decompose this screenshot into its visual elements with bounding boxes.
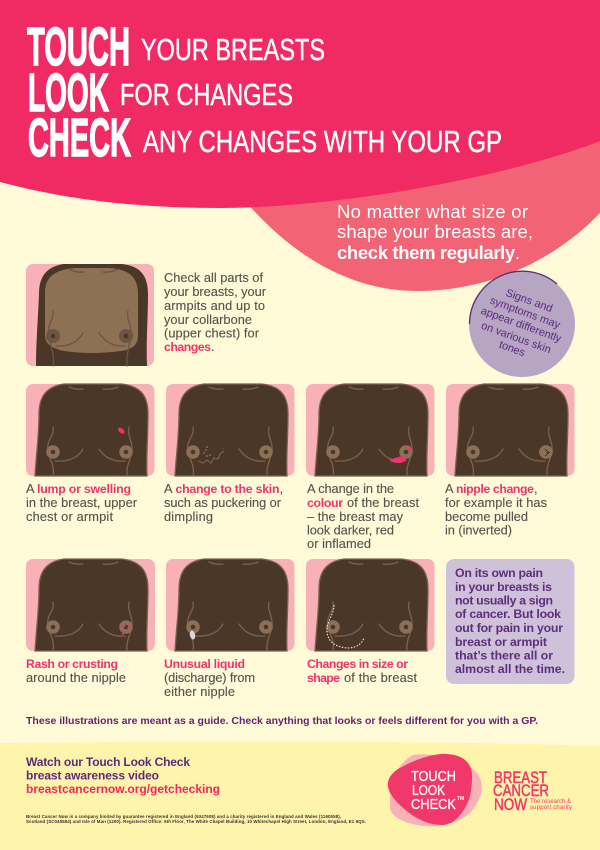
title: CHECK	[28, 108, 131, 168]
callout: skin tones	[469, 271, 575, 377]
video call to action: Watch our Touch Look Check	[26, 755, 190, 769]
text: size	[307, 657, 417, 685]
text: skin: A	[164, 481, 173, 496]
coral intro shape	[236, 120, 600, 291]
panel: pain note: that’s there all or	[455, 648, 553, 662]
text: liquid: (discharge) from	[164, 670, 255, 685]
video call to action: breast awareness video	[26, 768, 159, 782]
text: colour: or inflamed	[307, 536, 371, 551]
panel: pain note: On its own pain	[455, 566, 543, 580]
text: skin	[164, 481, 283, 524]
legal text	[26, 814, 366, 824]
intro text: check them regularly.	[337, 242, 520, 263]
text: colour: look darker, red	[307, 522, 394, 538]
text: skin: ,	[280, 481, 283, 496]
logo: touch look check: TOUCH	[411, 768, 456, 785]
text: skin: change to the skin	[176, 482, 280, 496]
text: nipple: nipple change	[456, 482, 534, 496]
illustration: puckered skin	[166, 384, 294, 476]
logo: touch look check: LOOK	[412, 782, 445, 799]
panel: nipple change	[445, 384, 574, 538]
text: colour: A change in the	[307, 481, 394, 496]
text: check all parts: changes	[164, 340, 211, 354]
intro text: No matter what size or	[337, 201, 528, 222]
panel: pain note: in your breasts is	[455, 580, 552, 594]
title: ANY CHANGES WITH YOUR GP	[143, 124, 502, 159]
legal text: Scotland (SC045584) and Isle of Man (1200). Registered Office: 6th Floor, The White Chapel Building, 10 Whitechapel High Street, London, England, E1 8QS.	[26, 819, 366, 824]
panel: check all parts	[26, 264, 267, 366]
text: nipple: for example it has	[445, 495, 547, 510]
panel: pain note: of cancer. But look	[455, 607, 561, 621]
text: rash: Rash or crusting	[26, 657, 118, 671]
logo: breast cancer now: NOW	[494, 795, 527, 814]
text: nipple: become pulled	[445, 509, 528, 524]
panel: unusual liquid	[164, 559, 294, 699]
text: liquid	[164, 657, 255, 699]
text: nipple: ,	[534, 481, 538, 496]
text: colour: – the breast may	[307, 509, 404, 524]
illustration: lighter torso	[26, 264, 154, 366]
text: colour	[307, 481, 419, 551]
header banner	[0, 0, 600, 208]
panel: lump or swelling	[26, 384, 154, 524]
panel: changes in size or shape	[306, 559, 434, 685]
text: check all parts	[164, 270, 267, 354]
text: lump	[26, 481, 138, 524]
text: colour: of the breast	[347, 495, 419, 510]
text: check all parts: Check all parts of	[164, 270, 263, 285]
callout: skin tones: symptoms may	[488, 295, 562, 331]
text: nipple	[445, 481, 547, 538]
panel: pain note: almost all the time.	[455, 662, 565, 676]
text: check all parts: (upper chest) for	[164, 326, 260, 340]
intro text: shape your breasts are,	[337, 221, 533, 242]
text: colour: colour	[307, 496, 343, 510]
illustration: inverted nipple	[446, 384, 574, 476]
text: size: of the breast	[344, 670, 417, 685]
text: check all parts: your breasts, your	[164, 284, 267, 299]
illustration: colour patch	[306, 384, 434, 476]
panel: pain note: breast or armpit	[455, 635, 547, 649]
text: nipple: A	[445, 481, 454, 496]
logo: breast cancer now: The research &	[530, 799, 571, 805]
text: liquid: Unusual liquid	[164, 657, 245, 671]
legal text: Breast Cancer Now is a company limited by guarantee registered in England (9347608) and a charity registered in England and Wales (1160558),	[26, 814, 341, 819]
callout: skin tones: on various skin	[479, 320, 553, 356]
logo: breast cancer now: CANCER	[493, 781, 549, 800]
video call to action: breastcancernow.org/getchecking	[26, 782, 220, 796]
logo: breast cancer now	[493, 768, 572, 814]
text: liquid: either nipple	[164, 684, 235, 699]
callout: skin tones: appear differently	[479, 305, 563, 345]
panel: colour change	[306, 384, 434, 551]
illustration: lump	[26, 384, 154, 476]
text: check all parts: .	[211, 339, 215, 354]
text: skin: such as puckering or	[164, 495, 282, 510]
text: skin: dimpling	[164, 509, 213, 524]
guide note: These illustrations are meant as a guide. Check anything that looks or feels different for you with a GP.	[26, 715, 538, 727]
logo: breast cancer now: support charity	[530, 805, 572, 811]
text: size: shape	[307, 671, 340, 685]
text: rash	[26, 657, 126, 685]
callout: skin tones: Signs and	[504, 287, 554, 315]
text: lump: A	[26, 481, 35, 496]
panel: change to the skin	[164, 384, 294, 524]
logo: touch look check	[388, 754, 482, 826]
panel: pain note	[446, 559, 574, 684]
illustration: size outline	[306, 559, 434, 651]
title: YOUR BREASTS	[141, 32, 325, 67]
title: TOUCH	[27, 17, 130, 77]
illustration: rash	[26, 559, 155, 651]
logo: touch look check: TM	[457, 796, 464, 802]
title: LOOK	[28, 63, 109, 123]
text: size: Changes in size or	[307, 657, 408, 671]
footer band	[0, 741, 600, 850]
text: lump: in the breast, upper	[26, 495, 138, 510]
text: check all parts: your collarbone	[164, 312, 252, 327]
text: check all parts: armpits and up to	[164, 298, 265, 313]
callout: skin tones: tones	[497, 339, 527, 359]
title: FOR CHANGES	[120, 77, 293, 112]
panel: rash or crusting	[26, 559, 155, 685]
text: nipple: in (inverted)	[445, 522, 512, 538]
video call to action	[26, 755, 220, 796]
title	[27, 17, 502, 168]
text: rash: around the nipple	[26, 670, 126, 685]
panel: pain note: not usually a sign	[455, 594, 553, 608]
panel: pain note: out for pain in your	[455, 621, 563, 635]
logo: touch look check: CHECK	[411, 796, 456, 813]
illustration: discharge	[166, 559, 294, 651]
text: lump: chest or armpit	[26, 509, 113, 524]
text: lump: lump or swelling	[37, 482, 131, 496]
logo: breast cancer now: BREAST	[494, 768, 547, 787]
intro text	[337, 201, 533, 263]
